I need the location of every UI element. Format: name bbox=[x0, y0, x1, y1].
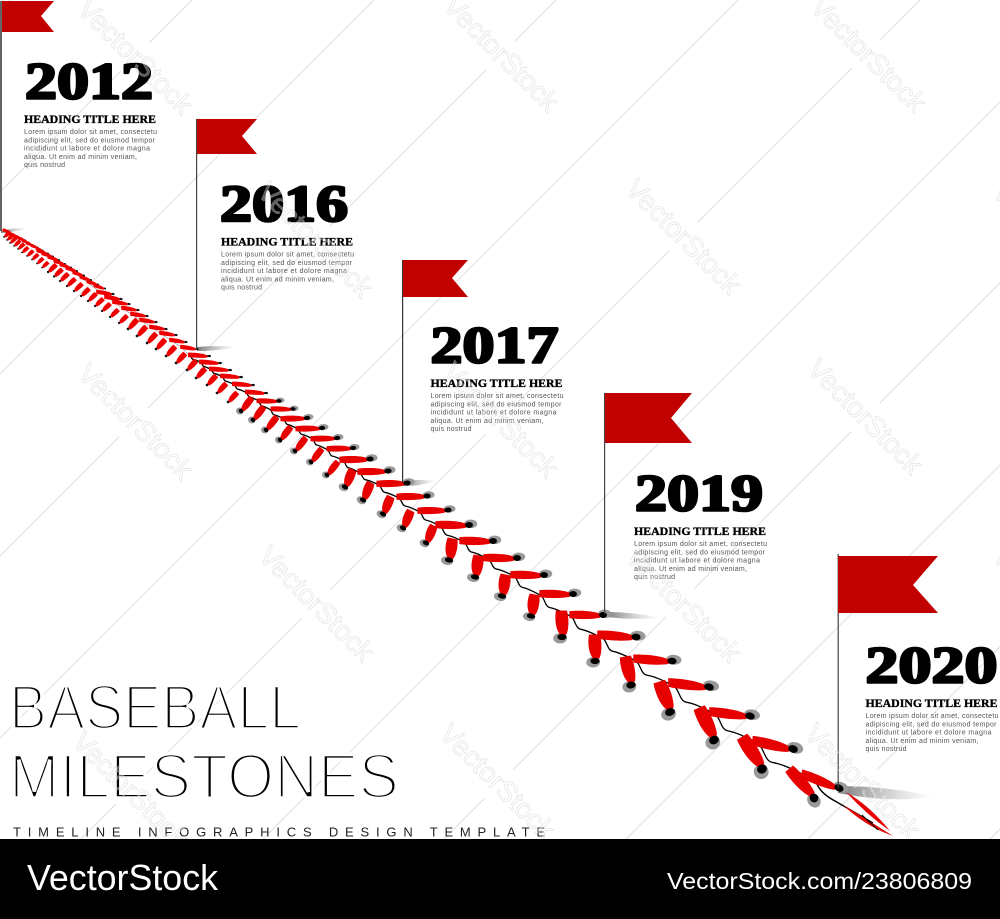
milestone 2017: Lorem ipsum dolor sit amet, consectetu bbox=[430, 393, 564, 400]
milestone 2012 bbox=[24, 54, 157, 169]
milestone 2016: 2016 bbox=[220, 176, 348, 233]
watermarks: VectorStock bbox=[620, 541, 748, 669]
milestone 2012: aliqua. Ut enim ad minim veniam, bbox=[24, 154, 137, 161]
watermarks: VectorStock bbox=[72, 358, 200, 486]
milestone 2012: adipiscing elit, sed do eiusmod tempor bbox=[24, 137, 156, 144]
pole shadows bbox=[1, 228, 937, 799]
milestone 2019: incididunt ut labore et dolore magna bbox=[634, 558, 760, 564]
milestone 2019: Lorem ipsum dolor sit amet, consectetu bbox=[634, 541, 767, 548]
footer bar bbox=[0, 839, 1000, 919]
milestone 2019: 2019 bbox=[635, 466, 763, 523]
watermarks: VectorStock bbox=[252, 176, 380, 304]
milestone 2020: Lorem ipsum dolor sit amet, consectetu bbox=[866, 713, 999, 720]
watermarks: VectorStock bbox=[799, 718, 927, 846]
watermarks: VectorStock bbox=[67, 726, 195, 854]
milestone 2019: quis nostrud bbox=[634, 574, 675, 581]
title: MILESTONES bbox=[9, 742, 399, 812]
milestone 2020: aliqua. Ut enim ad minim veniam, bbox=[866, 738, 979, 745]
milestone 2017 bbox=[430, 318, 564, 433]
baseball seam line bbox=[1, 230, 873, 823]
milestone 2017: 2017 bbox=[430, 318, 558, 375]
watermarks: VectorStock bbox=[437, 356, 565, 484]
milestone 2020: quis nostrud bbox=[866, 746, 907, 753]
watermarks: VectorStock bbox=[620, 173, 748, 301]
subtitle: TIMELINE INFOGRAPHICS DESIGN TEMPLATE bbox=[13, 824, 545, 840]
milestone 2016: incididunt ut labore et dolore magna bbox=[221, 268, 347, 275]
milestone 2016: HEADING TITLE HERE bbox=[221, 234, 353, 248]
milestone 2019: adipiscing elit, sed do eiusmod tempor bbox=[634, 549, 766, 556]
milestone 2019 bbox=[634, 466, 767, 581]
milestone 2012: quis nostrud bbox=[24, 162, 65, 169]
flag 2019 bbox=[604, 393, 692, 614]
milestone 2020: 2020 bbox=[866, 638, 998, 695]
milestone 2016 bbox=[220, 176, 354, 292]
milestone 2020: adipiscing elit, sed do eiusmod tempor bbox=[866, 721, 997, 728]
milestone 2019: aliqua. Ut enim ad minim veniam, bbox=[634, 566, 747, 573]
watermarks: VectorStock bbox=[434, 718, 562, 846]
milestone 2019: HEADING TITLE HERE bbox=[634, 524, 766, 538]
milestone 2016: Lorem ipsum dolor sit amet, consectetu bbox=[221, 252, 354, 258]
upper stitches bbox=[3, 228, 850, 796]
milestone 2012: 2012 bbox=[25, 54, 153, 111]
lower stitches bbox=[2, 230, 824, 810]
milestone 2012: Lorem ipsum dolor sit amet, consectetu bbox=[24, 129, 157, 136]
flag 2020 bbox=[838, 554, 938, 788]
seam end tails bbox=[843, 792, 893, 836]
milestone 2017: HEADING TITLE HERE bbox=[430, 376, 562, 390]
milestone 2016: quis nostrud bbox=[221, 284, 262, 292]
milestone 2017: quis nostrud bbox=[430, 426, 472, 433]
footer bar: VectorStock bbox=[27, 857, 219, 898]
flag 2017 bbox=[402, 260, 468, 483]
milestone 2016: adipiscing elit, sed do eiusmod tempor bbox=[221, 260, 353, 267]
milestone 2012: incididunt ut labore et dolore magna bbox=[24, 146, 150, 152]
title bbox=[9, 673, 399, 812]
milestone 2012: HEADING TITLE HERE bbox=[24, 112, 156, 126]
milestone 2020 bbox=[866, 638, 999, 753]
milestone 2017: adipiscing elit, sed do eiusmod tempor bbox=[430, 401, 562, 408]
milestone 2016: aliqua. Ut enim ad minim veniam, bbox=[221, 276, 334, 283]
flag 2016 bbox=[196, 119, 257, 349]
footer bar: VectorStock.com/23806809 bbox=[667, 868, 972, 894]
milestone 2017: incididunt ut labore et dolore magna bbox=[430, 410, 557, 416]
title: BASEBALL bbox=[9, 673, 301, 743]
milestone 2020: HEADING TITLE HERE bbox=[866, 696, 998, 710]
flag 2012 bbox=[0, 1, 54, 231]
milestone 2017: aliqua. Ut enim ad minim veniam, bbox=[430, 418, 544, 425]
watermarks: VectorStock bbox=[253, 540, 381, 668]
milestone 2020: incididunt ut labore et dolore magna bbox=[866, 730, 992, 736]
watermarks: VectorStock bbox=[802, 353, 930, 481]
